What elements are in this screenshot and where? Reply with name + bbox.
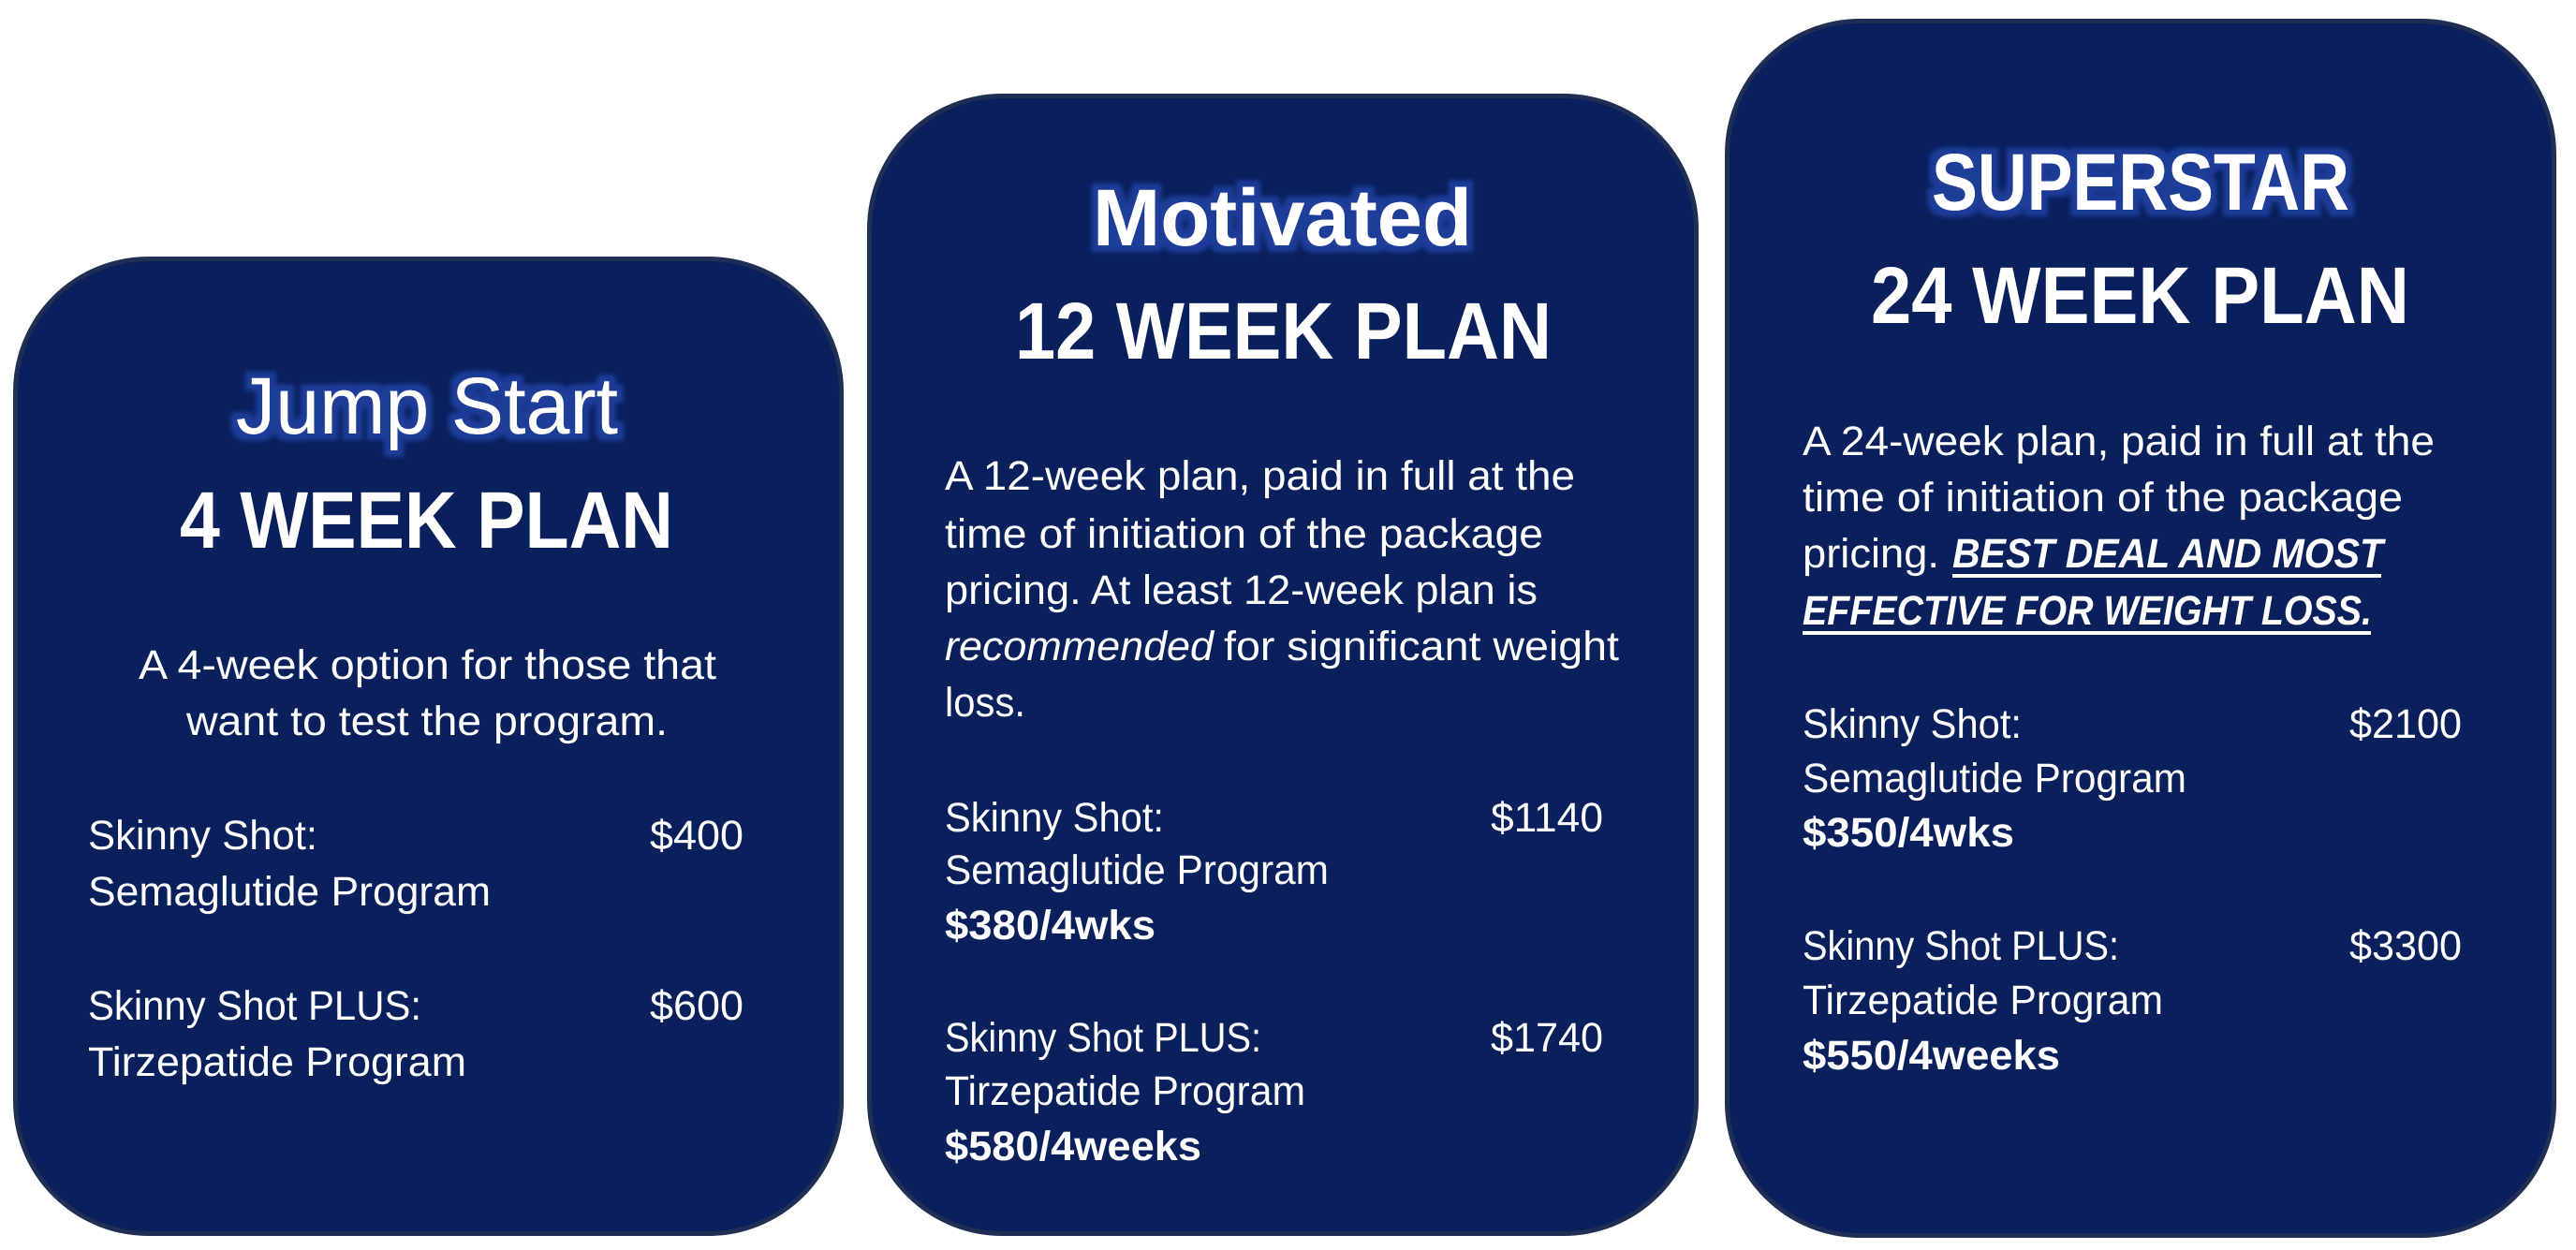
price row: Skinny Shot PLUS: Skinny Shot PLUS: — [88, 983, 421, 1029]
price row: Skinny Shot: Semaglutide Program — [1803, 756, 2186, 801]
description: A 4-week option for those that — [139, 642, 716, 688]
heading: 12 WEEK PLAN: 12 WEEK PLAN — [1015, 287, 1552, 376]
price row: Skinny Shot PLUS: Skinny Shot PLUS: — [945, 1015, 1261, 1061]
description: time of initiation of the package — [945, 511, 1543, 557]
price row: Skinny Shot PLUS: Tirzepatide Program — [945, 1068, 1305, 1114]
price row: Skinny Shot PLUS: $1740 — [1491, 1015, 1603, 1061]
price row: Skinny Shot: $1140 — [1491, 795, 1603, 841]
panel: Jump Start 4 week plan — [15, 258, 841, 1234]
price row: Skinny Shot PLUS: $3300 — [2349, 923, 2462, 969]
panel background — [1727, 21, 2554, 1236]
description: BEST DEAL AND MOST — [1952, 531, 2386, 577]
price row: Skinny Shot: $400 — [650, 813, 743, 859]
description: pricing. — [1803, 531, 1939, 577]
price row: Skinny Shot PLUS — [945, 1015, 1603, 1169]
price row: Skinny Shot: $380/4wks — [945, 903, 1156, 949]
price row: Skinny Shot PLUS: Tirzepatide Program — [1803, 978, 2163, 1023]
price row: Skinny Shot PLUS — [1803, 923, 2462, 1079]
description: pricing. At least 12-week plan is — [945, 567, 1538, 613]
heading: SUPERSTAR: SUPERSTAR — [1932, 138, 2349, 228]
price row: Skinny Shot — [945, 795, 1603, 949]
description: recommended — [945, 624, 1215, 669]
price row: Skinny Shot PLUS — [88, 983, 743, 1085]
description: time of initiation of the package — [1803, 475, 2403, 521]
description: EFFECTIVE FOR WEIGHT LOSS. — [1803, 588, 2372, 634]
panel: Motivated 12 week plan — [869, 96, 1697, 1234]
price row: Skinny Shot PLUS: Tirzepatide Program — [88, 1039, 466, 1085]
price row: Skinny Shot: Skinny Shot: — [945, 795, 1164, 841]
price row: Skinny Shot PLUS: $600 — [650, 983, 743, 1029]
panel: SUPERSTAR 24 week plan — [1727, 21, 2554, 1236]
heading: Jump Start: Jump Start — [236, 361, 618, 451]
description: A 12-week plan, paid in full at the — [945, 453, 1575, 499]
price row: Skinny Shot — [88, 813, 743, 915]
price row: Skinny Shot PLUS: $550/4weeks — [1803, 1033, 2060, 1079]
price row: Skinny Shot PLUS: $580/4weeks — [945, 1124, 1201, 1169]
price row: Skinny Shot: $350/4wks — [1803, 810, 2014, 856]
heading: Motivated: Motivated — [1093, 173, 1472, 263]
description: loss. — [945, 680, 1025, 726]
description — [1803, 419, 2435, 635]
price row: Skinny Shot: Skinny Shot: — [1803, 701, 2022, 747]
description — [945, 453, 1619, 726]
price row: Skinny Shot: Semaglutide Program — [945, 847, 1329, 893]
heading: 24 WEEK PLAN: 24 WEEK PLAN — [1871, 251, 2409, 341]
description: A 24-week plan, paid in full at the — [1803, 419, 2435, 464]
heading: 4 WEEK PLAN: 4 WEEK PLAN — [180, 476, 673, 566]
panel background — [869, 96, 1697, 1234]
description — [139, 642, 716, 744]
price row: Skinny Shot PLUS: Skinny Shot PLUS: — [1803, 923, 2119, 969]
description: want to test the program. — [185, 699, 668, 744]
price row: Skinny Shot: Skinny Shot: — [88, 813, 317, 859]
panel background — [15, 258, 841, 1234]
price row: Skinny Shot — [1803, 701, 2462, 856]
price row: Skinny Shot: $2100 — [2349, 701, 2462, 747]
description: for significant weight — [1224, 624, 1619, 669]
price row: Skinny Shot: Semaglutide Program — [88, 869, 491, 915]
